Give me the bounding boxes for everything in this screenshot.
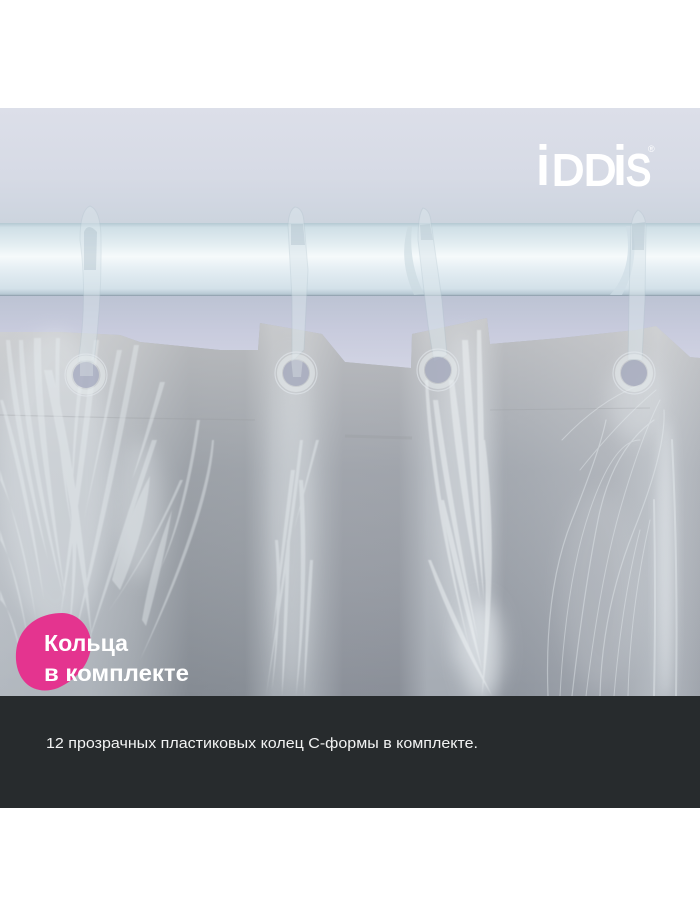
logo: iDDiS: ®	[648, 144, 655, 154]
logo: iDDiS	[536, 134, 655, 198]
caption text: 12 прозрачных пластиковых колец С-формы в комплекте.	[46, 735, 478, 752]
ring 2	[275, 207, 317, 394]
hem seams	[0, 408, 650, 418]
highlights of folds	[0, 330, 674, 700]
curtain fabric	[0, 318, 700, 700]
wall above rod	[0, 108, 700, 224]
badge: pink blob	[16, 613, 91, 690]
heading: rings included: в комплекте	[44, 660, 189, 686]
feather pattern: third panel	[425, 330, 492, 696]
logo: iDDiS: S	[626, 146, 651, 195]
feather pattern: second panel	[266, 440, 319, 696]
heading: rings included	[44, 630, 189, 686]
wall below rod	[0, 296, 700, 368]
feather pattern: fourth panel	[548, 385, 676, 696]
ring 4	[613, 210, 655, 394]
logo: iDDiS: D	[584, 146, 616, 195]
logo: iDDiS: i	[613, 134, 627, 198]
ring 3	[417, 208, 459, 391]
heading: rings included: Кольца	[44, 630, 128, 656]
logo: iDDiS: D	[552, 146, 584, 195]
feather pattern: left panel	[0, 338, 214, 660]
logo: iDDiS: i	[536, 134, 550, 198]
ring 1	[65, 206, 107, 396]
curtain rod	[0, 223, 700, 296]
photo: shower curtain on rod	[0, 108, 700, 700]
dark caption band	[0, 696, 700, 808]
